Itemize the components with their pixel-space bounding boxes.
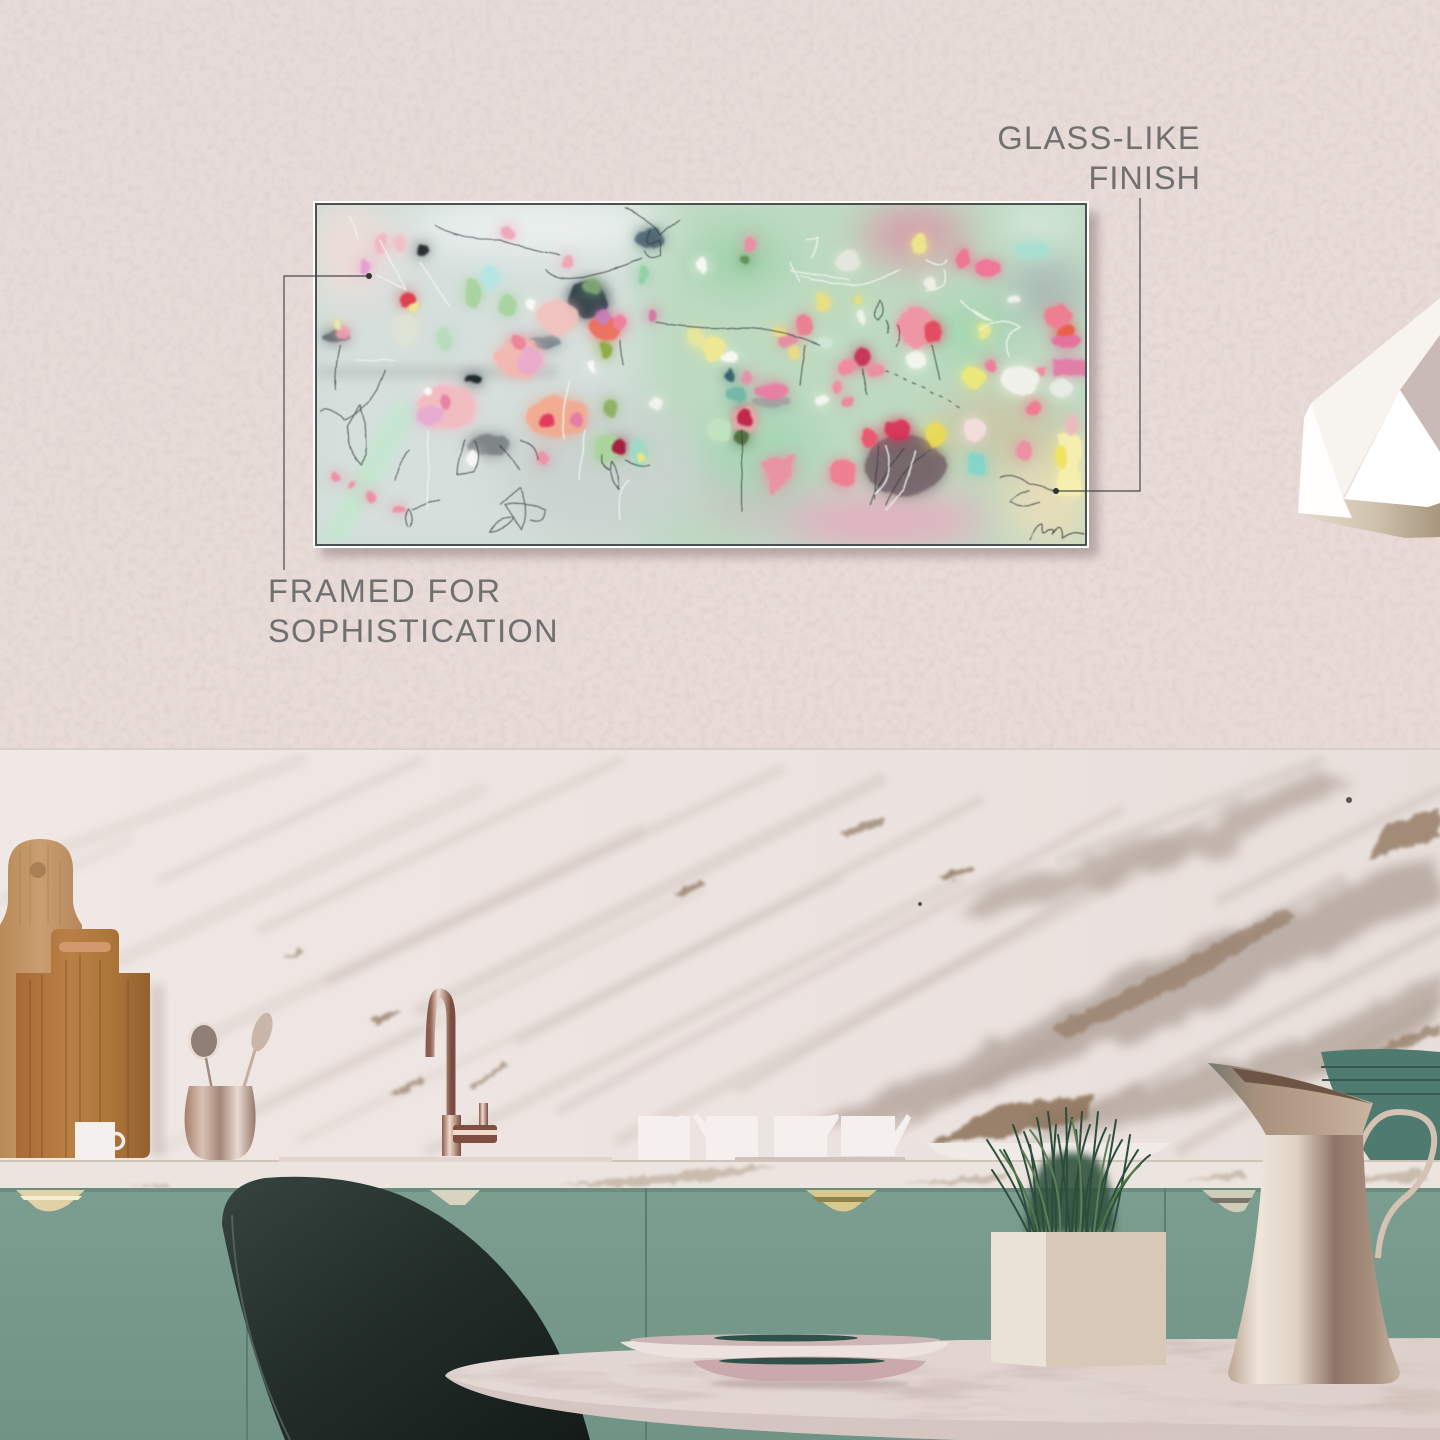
second spoon	[243, 1010, 277, 1090]
back board	[0, 839, 82, 1158]
cabinets	[0, 1188, 1440, 1440]
planter left face	[991, 1232, 1046, 1367]
utensil cup	[185, 1010, 277, 1160]
sink rim	[279, 1157, 612, 1162]
green bowls	[1321, 1049, 1440, 1160]
callout label: SOPHISTICATION	[268, 613, 559, 649]
cutting boards	[0, 839, 164, 1158]
painting ground	[316, 204, 1086, 545]
board shadow on marble	[150, 985, 164, 1155]
counter top	[0, 1157, 1440, 1188]
callout label: FINISH	[1088, 160, 1201, 196]
callout anchor dot	[1053, 488, 1059, 494]
background plates	[926, 1143, 1171, 1160]
callout anchor dot	[366, 273, 372, 279]
tap	[430, 993, 497, 1156]
plant in concrete planter	[987, 1108, 1166, 1367]
lower plate	[693, 1356, 926, 1381]
white mug	[75, 1122, 124, 1160]
lamp opening	[1400, 335, 1440, 452]
pitcher rim	[1232, 1068, 1372, 1104]
table	[440, 1335, 1440, 1440]
white frame	[313, 201, 1089, 548]
grass	[987, 1108, 1150, 1232]
pitcher handle	[1360, 1112, 1434, 1258]
ink stems and leaf outlines	[320, 208, 1056, 532]
callout label: GLASS-LIKE	[997, 120, 1201, 156]
front board slot	[59, 942, 111, 952]
front board	[16, 929, 150, 1158]
upper plate	[620, 1334, 950, 1358]
callout: glass-like finish	[997, 120, 1201, 494]
bright facet	[1344, 390, 1440, 507]
board hole	[30, 862, 46, 878]
callout leader line	[284, 276, 369, 570]
brass cabinet handles	[16, 1190, 1256, 1212]
left facet	[1298, 403, 1352, 518]
artist signature	[1030, 524, 1084, 540]
art print: framed floral painting	[300, 190, 1100, 560]
spoon	[188, 1022, 220, 1090]
planter right face	[1046, 1232, 1166, 1367]
callout label: FRAMED FOR	[268, 573, 502, 609]
blooms and leaves	[331, 225, 1086, 513]
pendant lamp	[1298, 298, 1440, 538]
white teapots	[638, 1114, 911, 1161]
frame shadow	[322, 212, 1098, 557]
plate shadow	[710, 1379, 910, 1389]
light beam and grey band	[318, 366, 558, 540]
panel: marble backsplash	[0, 750, 1440, 1162]
painting washes	[317, 205, 1085, 544]
pitcher body	[1228, 1135, 1400, 1384]
chair	[222, 1177, 590, 1440]
pale brushed stems	[350, 215, 1020, 520]
background: plaster wall	[0, 0, 1440, 750]
upper facet	[1311, 298, 1440, 498]
lamp underside	[1298, 499, 1440, 538]
plates on table	[620, 1334, 950, 1381]
callout leader line	[1056, 198, 1140, 491]
copper pitcher	[1208, 1063, 1434, 1384]
callout: framed for sophistication	[268, 273, 559, 649]
pitcher collar	[1208, 1063, 1373, 1135]
dark and grey paint patches	[322, 228, 945, 495]
